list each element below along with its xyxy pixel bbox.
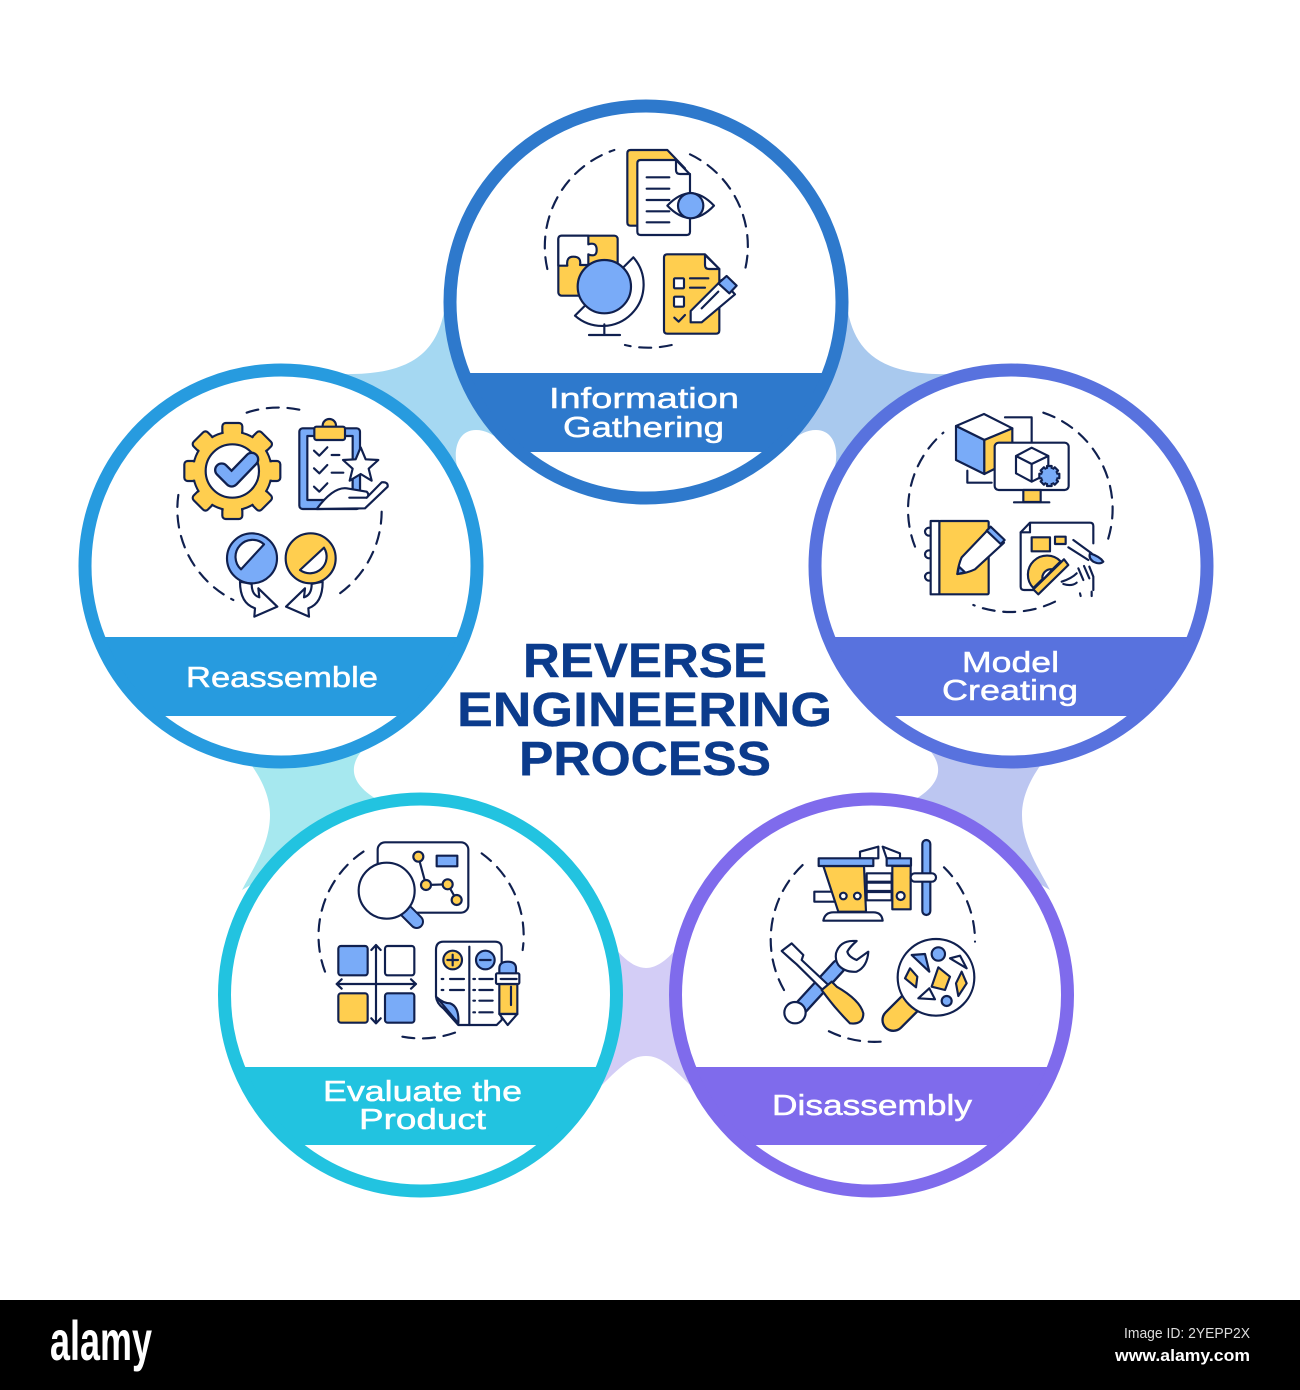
footer bar: [0, 1300, 1300, 1390]
label band: [696, 1067, 1047, 1145]
label band: [835, 637, 1187, 716]
icon group: chart, magnifier, matrix, pros and cons: [319, 842, 524, 1038]
title: ENGINEERING: [457, 684, 832, 737]
label text: Creating: [942, 675, 1078, 707]
panel: Reassemble: [75, 370, 487, 762]
panel: Disassembly: [665, 799, 1078, 1191]
image id: Image ID: 2YEPP2X: [1124, 1325, 1250, 1342]
icon group: documents, puzzle, globe, checklist: [545, 150, 748, 348]
label text: Model: [962, 647, 1059, 679]
icon group: cube, monitor, notebook, drafting: [908, 413, 1113, 612]
connector: Reassemble to Information Gathering: [340, 300, 500, 470]
connector: Evaluate the Product to Reassemble: [217, 720, 387, 890]
label text: [323, 1076, 522, 1136]
label band: [470, 373, 822, 452]
label text: [942, 647, 1078, 707]
panel: Model Creating: [805, 370, 1217, 762]
label text: [549, 383, 739, 444]
label band: [105, 637, 457, 716]
connector: Evaluate the Product to Disassembly: [602, 945, 690, 1085]
website: www.alamy.com: [1114, 1346, 1250, 1365]
footer logo: alamy: [50, 1309, 152, 1372]
label text: Disassembly: [772, 1090, 973, 1122]
icon group: gear, clipboard, swap circles: [177, 408, 388, 617]
label text: Reassemble: [186, 662, 378, 694]
label band: [245, 1067, 596, 1145]
title: REVERSE: [523, 635, 767, 688]
label text: Evaluate the: [323, 1076, 522, 1108]
label text: Product: [359, 1104, 486, 1136]
panel: Information Gathering: [440, 106, 852, 498]
label text: Gathering: [563, 412, 724, 444]
connector: Information Gathering to Model Creating: [792, 300, 952, 470]
title: PROCESS: [519, 733, 771, 786]
title: [457, 635, 832, 786]
label text: Information: [549, 383, 739, 415]
icon group: vise, tools, magnified parts: [771, 840, 975, 1042]
panel: Evaluate the Product: [214, 799, 627, 1191]
connector: Model Creating to Disassembly: [905, 720, 1075, 890]
